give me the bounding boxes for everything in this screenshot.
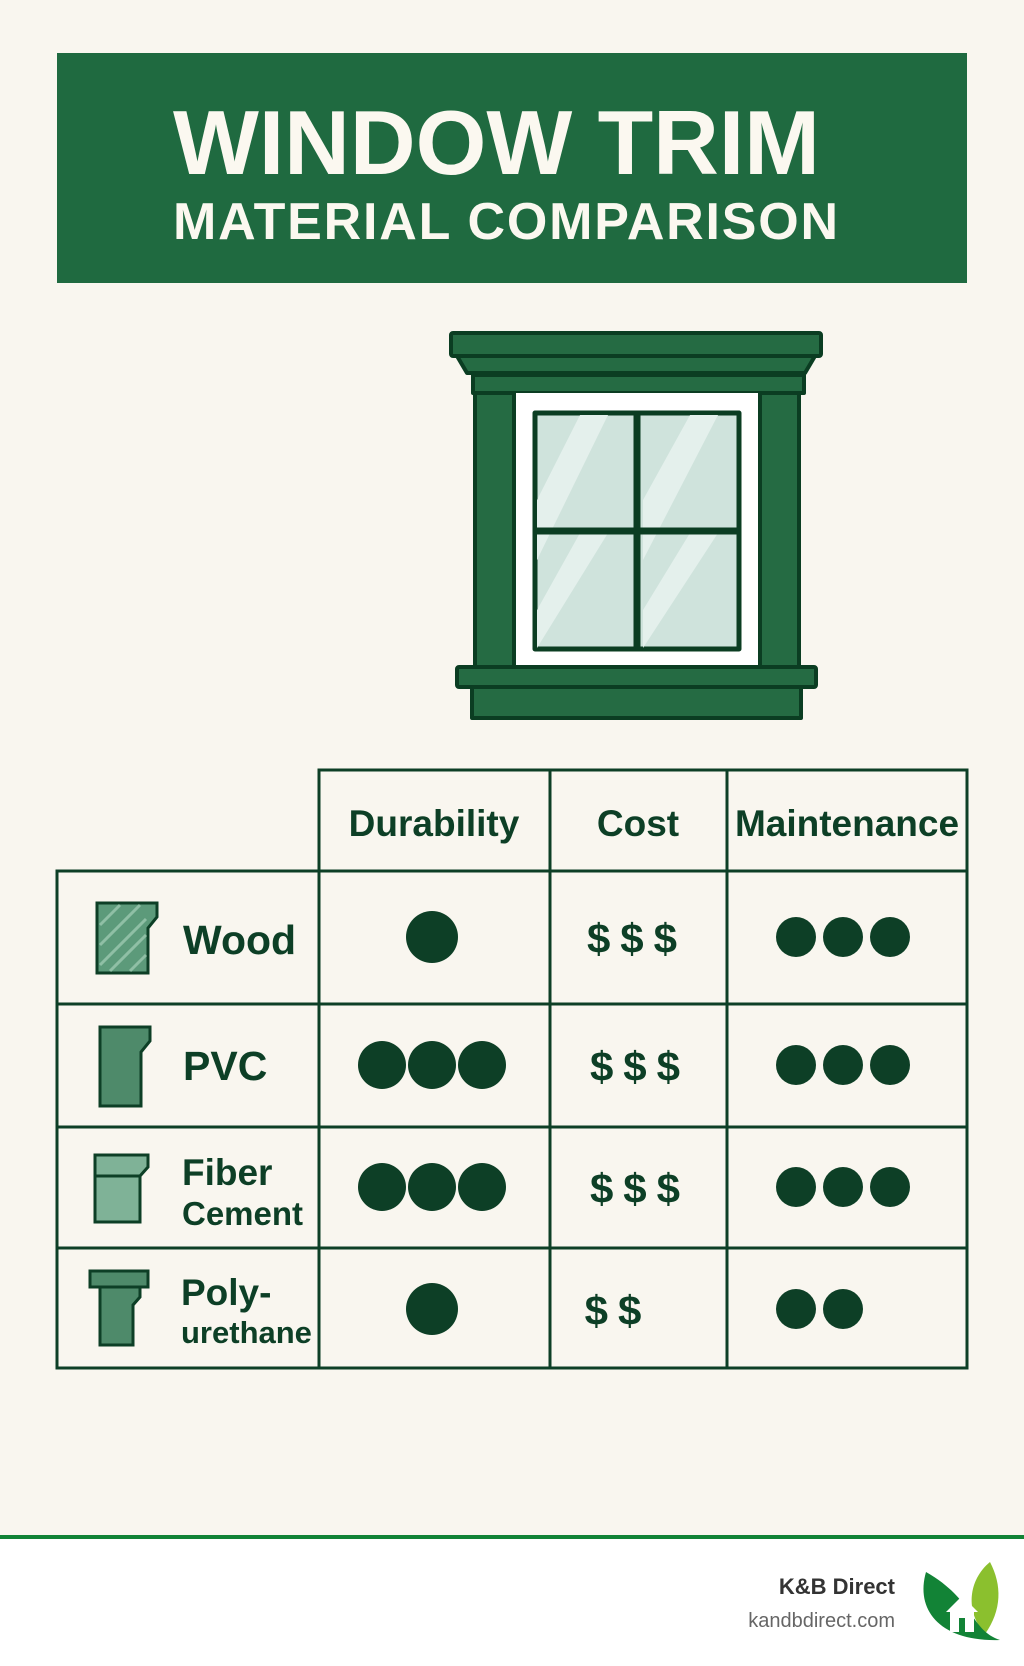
- row: Wood: Wood: [183, 917, 296, 963]
- brand name: K&B Direct: [779, 1574, 896, 1599]
- column headers: Maintenance: [735, 803, 959, 844]
- row: Fiber Cement: $$$: [590, 1165, 690, 1212]
- row: PVC: PVC: [183, 1043, 267, 1089]
- window illustration: [451, 333, 821, 718]
- row: Fiber Cement: Fiber: [182, 1152, 272, 1193]
- subtitle: MATERIAL COMPARISON: [173, 193, 840, 251]
- row: Fiber Cement: [95, 1152, 910, 1232]
- row: PVC: $$$: [590, 1043, 690, 1090]
- comparison table: [57, 770, 967, 1368]
- row: Polyurethane: $$: [585, 1287, 651, 1334]
- icon: logo leaf house: [923, 1562, 1000, 1640]
- column headers: [349, 803, 959, 844]
- row: Fiber Cement: Cement: [182, 1195, 303, 1232]
- row: Wood: [97, 903, 910, 973]
- url: kandbdirect.com: [748, 1610, 895, 1632]
- column headers: Cost: [597, 803, 679, 844]
- row: PVC: [100, 1027, 910, 1106]
- row: Polyurethane: urethane: [181, 1315, 312, 1350]
- row: Wood: $$$: [587, 915, 687, 962]
- title banner: [57, 53, 967, 283]
- row: Polyurethane: Poly-: [181, 1272, 271, 1313]
- column headers: Durability: [349, 803, 520, 844]
- footer: [0, 1535, 1024, 1666]
- title: WINDOW TRIM: [173, 93, 820, 194]
- row: Polyurethane: [90, 1271, 863, 1350]
